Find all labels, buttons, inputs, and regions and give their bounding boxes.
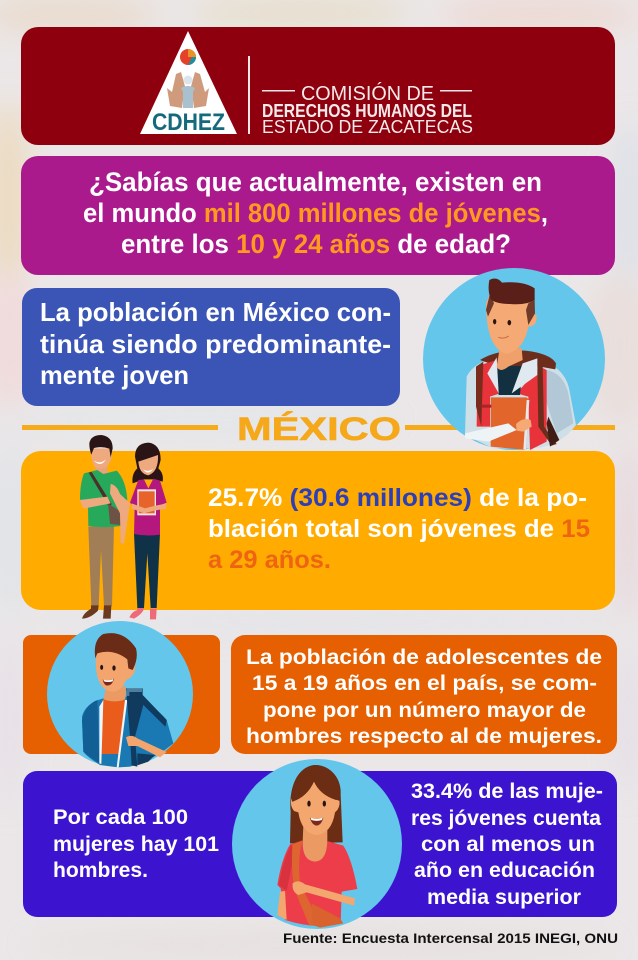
panel: adolescents text card: pone por un número mayor de (263, 699, 586, 722)
panel: world youth question (21, 156, 615, 275)
panel: left orange card with boy (23, 621, 220, 767)
panel: adolescents text card (231, 635, 617, 754)
man (80, 435, 130, 619)
illustration: young couple (80, 435, 167, 619)
source note: Fuente: Encuesta Intercensal 2015 INEGI, ONU (283, 930, 618, 946)
logo wordmark: CDHEZ (152, 109, 225, 136)
organisation name: ESTADO DE ZACATECAS (262, 116, 473, 137)
illustration: young woman (277, 765, 357, 928)
panel: world youth question: entre los 10 y 24 años de edad? (121, 229, 511, 259)
panel: world youth question: el mundo mil 800 millones de jóvenes, (83, 198, 548, 228)
panel: population of Mexico: La población en México con- (40, 299, 391, 327)
text: upper secondary education (411, 779, 603, 909)
panel: indigo statistics card (23, 759, 617, 929)
panel: adolescents text card: hombres respecto al de mujeres. (246, 725, 602, 748)
organisation name (262, 82, 473, 137)
woman (129, 443, 167, 619)
text: upper secondary education: media superior (427, 885, 582, 909)
panel: adolescents text card: La población de adolescentes de (246, 646, 602, 669)
illustration: boy with backpack (82, 633, 173, 767)
text: men per 100 women: Por cada 100 (53, 805, 188, 829)
panel: header (21, 27, 615, 145)
heading: México divider: MÉXICO (237, 411, 401, 447)
panel: adolescents text card: 15 a 19 años en el país, se com- (252, 672, 597, 695)
panel: world youth question: ¿Sabías que actualmente, existen en (89, 167, 542, 197)
text: upper secondary education: año en educación (414, 858, 595, 882)
text: men per 100 women: mujeres hay 101 (53, 832, 219, 856)
organisation name: COMISIÓN DE (301, 82, 434, 105)
logo: CDHEZ triangle (140, 31, 237, 136)
text: men per 100 women: hombres. (53, 858, 148, 882)
panel: population of Mexico (22, 288, 400, 406)
text: upper secondary education: 33.4% de las muje- (411, 779, 603, 803)
panel: population of Mexico: mente joven (40, 362, 189, 390)
panel: 25.7 percent statistic: blación total son jóvenes de 15 (208, 515, 590, 543)
panel: 25.7 percent statistic: a 29 años. (208, 546, 331, 574)
text: men per 100 women (53, 805, 219, 882)
text: upper secondary education: con al menos un (421, 832, 595, 856)
heading: México divider (22, 411, 615, 447)
panel: 25.7 percent statistic (21, 451, 615, 610)
organisation name: DERECHOS HUMANOS DEL (262, 101, 472, 121)
text: upper secondary education: res jóvenes cuenta (411, 806, 602, 830)
panel: population of Mexico: tinúa siendo predominante- (40, 331, 391, 359)
illustration: student with red vest (423, 268, 605, 450)
panel: 25.7 percent statistic: 25.7% (30.6 millones) de la po- (208, 484, 587, 512)
